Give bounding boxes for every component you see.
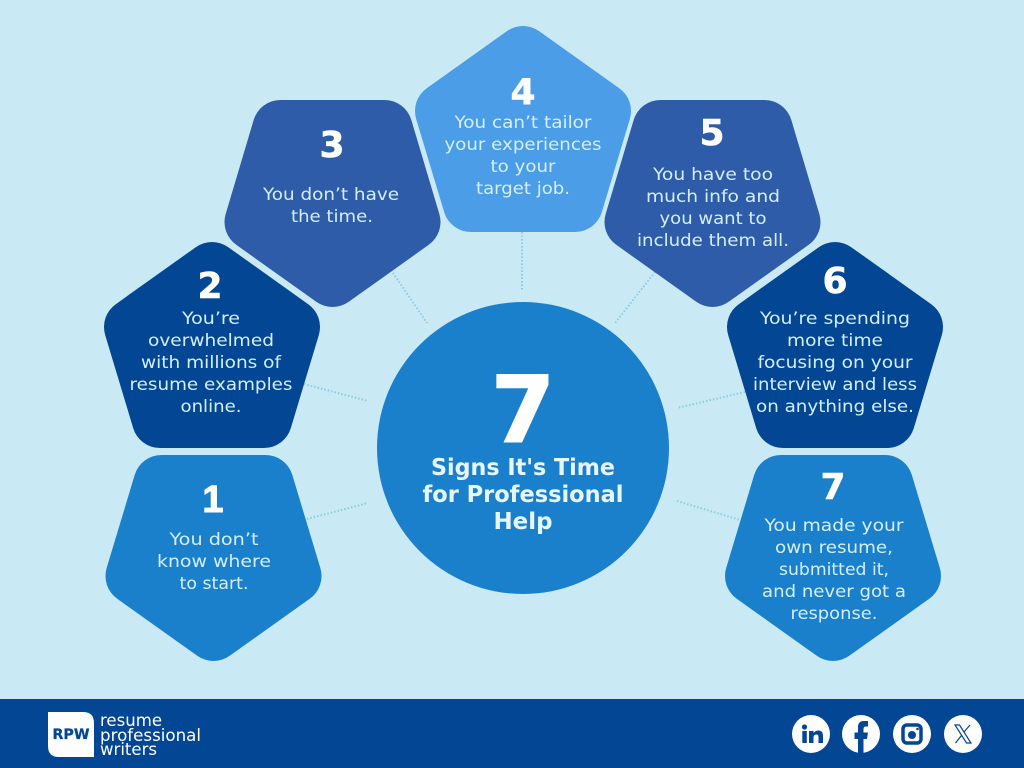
panel: sign 7: You made your bbox=[763, 516, 904, 536]
panel: sign 2: with millions of bbox=[141, 353, 282, 373]
panel: sign 1: to start. bbox=[180, 574, 248, 594]
panel: sign 7: and never got a bbox=[762, 582, 906, 602]
panel: sign 4: your experiences bbox=[444, 135, 602, 155]
panel: sign 7 bbox=[753, 467, 913, 633]
panel: sign 1 bbox=[134, 479, 294, 633]
central heading bbox=[422, 455, 624, 535]
panel: sign 7: 7 bbox=[820, 467, 846, 508]
central heading: for Professional bbox=[422, 482, 624, 508]
panel: sign 6: more time bbox=[787, 331, 883, 351]
big number 7: 7 bbox=[491, 357, 555, 464]
panel: sign 5: you want to bbox=[660, 209, 766, 229]
panel: sign 5: 5 bbox=[699, 113, 725, 154]
panel: sign 7: own resume, bbox=[775, 538, 893, 558]
panel: sign 5: much info and bbox=[646, 187, 780, 207]
panel: sign 4 bbox=[443, 54, 603, 204]
panel: sign 1: You don’t bbox=[168, 530, 259, 550]
panel: sign 2: online. bbox=[180, 397, 242, 417]
panel: sign 7: submitted it, bbox=[779, 560, 889, 580]
panel: sign 6: focusing on your bbox=[758, 353, 912, 373]
panel: sign 3 bbox=[252, 125, 412, 279]
logo bbox=[48, 711, 201, 760]
logo: writers bbox=[100, 740, 157, 760]
panel: sign 6: 6 bbox=[822, 261, 848, 302]
logo: professional bbox=[100, 726, 201, 746]
panel: sign 5: You have too bbox=[652, 165, 773, 185]
panel: sign 2: 2 bbox=[197, 266, 223, 307]
panel: sign 1: 1 bbox=[202, 479, 224, 521]
panel: sign 6: on anything else. bbox=[756, 397, 914, 417]
panel: sign 4: 4 bbox=[510, 72, 536, 113]
panel: sign 2 bbox=[130, 266, 293, 420]
panel: sign 3: 3 bbox=[319, 125, 345, 166]
icon: x bbox=[944, 715, 982, 753]
panel: sign 4: to your bbox=[490, 157, 556, 177]
panel: sign 3: You don’t have bbox=[262, 185, 399, 205]
panel: sign 2: overwhelmed bbox=[148, 331, 274, 351]
panel: sign 1: know where bbox=[157, 552, 271, 572]
footer bar bbox=[0, 699, 1024, 768]
panel: sign 3: the time. bbox=[291, 207, 373, 227]
logo: RPW bbox=[52, 727, 90, 743]
panel: sign 2: You’re bbox=[181, 309, 240, 329]
panel: sign 7: response. bbox=[790, 604, 878, 624]
panel: sign 5: include them all. bbox=[637, 231, 789, 251]
panel: sign 4: target job. bbox=[476, 179, 570, 199]
icon: facebook bbox=[842, 715, 880, 753]
central heading: Signs It's Time bbox=[431, 455, 615, 481]
panel: sign 6: You’re spending bbox=[759, 309, 910, 329]
central heading: Help bbox=[494, 509, 552, 535]
icon: linkedin bbox=[792, 715, 830, 753]
panel: sign 6 bbox=[753, 261, 917, 420]
panel: sign 4: You can’t tailor bbox=[453, 113, 592, 133]
panel: sign 2: resume examples bbox=[130, 375, 293, 395]
panel: sign 5 bbox=[632, 113, 792, 279]
central circle bbox=[377, 302, 669, 594]
icon: instagram bbox=[893, 715, 931, 753]
panel: sign 6: interview and less bbox=[753, 375, 917, 395]
logo: resume bbox=[100, 711, 162, 731]
